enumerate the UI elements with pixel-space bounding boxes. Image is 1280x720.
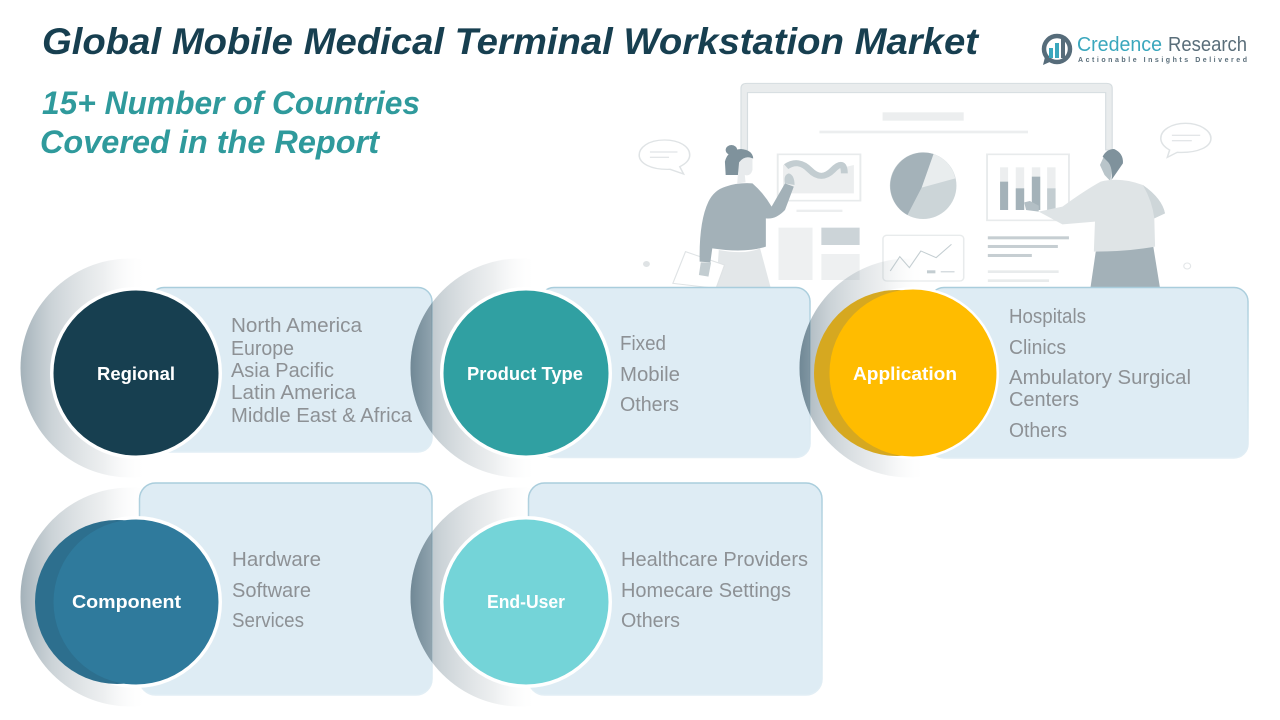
subtitle: 15+ Number of Countries <box>42 85 420 121</box>
subtitle: Covered in the Report <box>40 124 380 160</box>
speech bubble right <box>1161 123 1211 157</box>
list: Hardware <box>232 549 321 571</box>
list: Asia Pacific <box>231 360 334 382</box>
list: Others <box>621 610 680 632</box>
badge label: Product Type <box>467 364 583 384</box>
list: Clinics <box>1009 337 1066 359</box>
crescent <box>20 258 240 478</box>
badge <box>54 520 218 684</box>
badge ring <box>50 287 222 459</box>
badge <box>830 290 996 456</box>
panel: Product Type <box>410 258 810 478</box>
badge shadow <box>35 520 199 684</box>
list <box>621 549 808 632</box>
badge <box>444 520 608 684</box>
list: Ambulatory Surgical <box>1009 367 1191 389</box>
subtitle <box>40 85 420 160</box>
panel: Application <box>800 258 1248 478</box>
badge label: Component <box>72 592 181 612</box>
list: Services <box>232 610 304 632</box>
screen heading bars <box>796 112 1028 212</box>
list: Centers <box>1009 389 1079 411</box>
text lines <box>988 236 1069 282</box>
crescent overlap on Component card <box>410 532 432 662</box>
title: Global Mobile Medical Terminal Workstation Market <box>42 21 980 62</box>
panel: Component <box>20 483 432 706</box>
crescent <box>20 488 240 706</box>
list: Latin America <box>231 382 357 404</box>
speech bubble left <box>639 140 690 174</box>
woman presenter <box>673 145 795 288</box>
logo: Credence Research <box>1043 34 1247 65</box>
badge ring <box>50 516 222 688</box>
list: North America <box>231 315 363 337</box>
list <box>1009 306 1191 442</box>
badge <box>444 290 608 456</box>
badge label: Application <box>853 364 957 384</box>
list: Hospitals <box>1009 306 1086 328</box>
badge label: End-User <box>487 592 565 612</box>
badge label: Regional <box>97 364 175 384</box>
list: Others <box>1009 420 1067 442</box>
logo: Credence Research: Credence <box>1077 34 1162 56</box>
list <box>620 333 680 416</box>
badge ring <box>440 287 612 459</box>
list <box>231 315 413 427</box>
line chart <box>883 235 964 281</box>
list: Middle East & Africa <box>231 405 413 427</box>
crescent overlap on Product Type card <box>800 322 810 414</box>
panel: End-User <box>410 483 822 706</box>
logo: Credence Research: Research <box>1168 34 1247 56</box>
man presenter <box>1024 149 1165 288</box>
logo: Credence Research: Actionable Insights Delivered <box>1078 57 1247 64</box>
badge ring <box>440 516 612 688</box>
dashboard blocks <box>778 228 860 280</box>
crescent overlap on Regional card <box>410 303 432 433</box>
badge ring <box>827 287 999 459</box>
list: Healthcare Providers <box>621 549 808 571</box>
pie chart <box>890 152 956 219</box>
badge shadow <box>814 290 980 456</box>
badge <box>54 290 218 456</box>
illustration: presenters and dashboard screen <box>639 83 1211 288</box>
card <box>528 483 822 695</box>
bar chart <box>987 154 1069 220</box>
crescent <box>800 258 1018 478</box>
list: Software <box>232 580 311 602</box>
list: Homecare Settings <box>621 580 791 602</box>
list: Mobile <box>620 364 680 386</box>
list <box>232 549 321 632</box>
area chart <box>778 154 860 201</box>
list: Fixed <box>620 333 666 355</box>
crescent <box>410 488 630 706</box>
card <box>150 288 432 452</box>
card <box>540 288 810 458</box>
list: Others <box>620 394 679 416</box>
list: Europe <box>231 338 294 360</box>
card <box>140 483 432 695</box>
crescent <box>410 258 630 478</box>
panel: Regional <box>20 258 432 478</box>
monitor frame <box>741 83 1112 150</box>
card <box>930 288 1248 458</box>
small decorative dots <box>643 261 1191 269</box>
